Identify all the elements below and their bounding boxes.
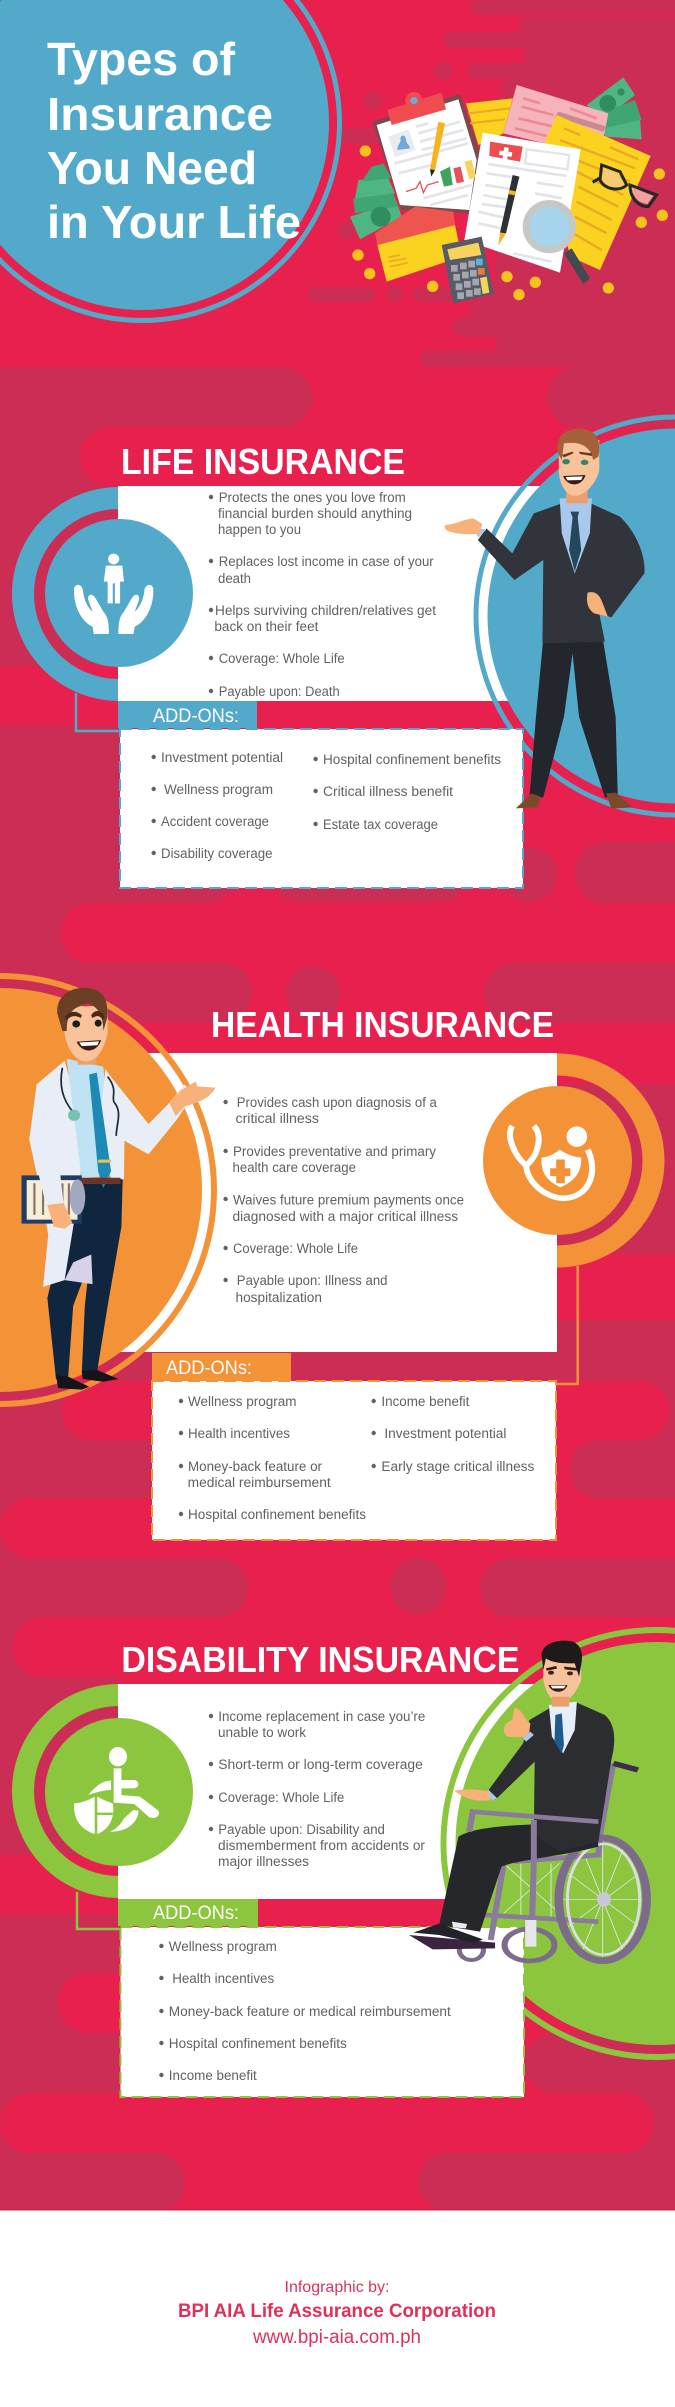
title: You Need <box>47 142 257 194</box>
text block: life benefits: happen to you <box>218 522 301 537</box>
white text card: disability <box>118 1684 600 1899</box>
text block: disability benefits: Short-term or long-term coverage <box>218 1757 423 1772</box>
add-ons card: life: Critical illness benefit <box>323 784 453 799</box>
add-ons card: health: Investment potential <box>384 1426 506 1441</box>
add-ons card: disability: Money-back feature or medical reimbursement <box>169 2004 451 2019</box>
add-ons card: life <box>120 729 523 888</box>
icon ring: life <box>12 487 118 701</box>
right circle: life <box>476 417 675 815</box>
add-ons card: life: Wellness program <box>164 782 273 797</box>
connector line: life <box>76 693 120 731</box>
footer text <box>178 2279 496 2348</box>
text block: disability benefits: major illnesses <box>218 1854 309 1869</box>
add-ons tag: disability: ADD-ONs: <box>153 1903 239 1924</box>
text block: health benefits: health care coverage <box>232 1160 356 1175</box>
add-ons card: life: Hospital confinement benefits <box>323 752 501 767</box>
text block: health benefits <box>223 1095 464 1305</box>
text block: life benefits: Payable upon: Death <box>219 684 340 699</box>
add-ons tag: life <box>118 701 257 728</box>
text block: disability benefits: unable to work <box>218 1725 306 1740</box>
add-ons card: life: Accident coverage <box>161 814 269 829</box>
text block: disability benefits: dismemberment from accidents or <box>218 1838 426 1853</box>
title: Insurance <box>47 88 273 140</box>
footer text: www.bpi-aia.com.ph <box>252 2327 421 2348</box>
text block: health benefits: Coverage: Whole Life <box>233 1241 358 1256</box>
character: doctor <box>22 988 215 1390</box>
text block: disability benefits: Payable upon: Disability and <box>218 1822 385 1837</box>
add-ons card: health: Early stage critical illness <box>381 1459 535 1474</box>
add-ons card: life: Estate tax coverage <box>323 817 438 832</box>
add-ons card: disability: Income benefit <box>169 2068 257 2083</box>
title: in Your Life <box>47 196 301 248</box>
text block: life benefits: Helps surviving children/relatives get <box>215 603 436 618</box>
text block: health benefits: hospitalization <box>236 1290 322 1305</box>
text block: health benefits: critical illness <box>236 1111 319 1126</box>
white text card: health <box>100 1053 557 1352</box>
add-ons card: health: Income benefit <box>381 1394 470 1409</box>
text block: health benefits: Provides cash upon diagnosis of a <box>237 1095 437 1110</box>
text block: health benefits: Payable upon: Illness and <box>237 1273 388 1288</box>
panel: life insurance <box>23 417 675 888</box>
text block: life benefits: back on their feet <box>214 619 319 634</box>
header circle <box>0 0 340 320</box>
add-ons card: health: Hospital confinement benefits <box>188 1507 366 1522</box>
right circle: disability <box>444 1630 675 2057</box>
footer panel <box>0 2210 675 2407</box>
footer text: Infographic by: <box>284 2279 390 2296</box>
add-ons card: health: Health incentives <box>188 1426 290 1441</box>
connector line: disability <box>77 1892 120 1929</box>
connector line: health <box>555 1266 578 1384</box>
add-ons card: health: Money-back feature or <box>188 1459 322 1474</box>
text block: life benefits: Replaces lost income in case of your <box>219 554 434 569</box>
left circle: health <box>0 976 214 1404</box>
add-ons card: disability <box>120 1927 524 2097</box>
text block: disability benefits: Income replacement in case you’re <box>218 1709 425 1724</box>
add-ons card: health <box>152 1381 556 1540</box>
text block: life benefits: financial burden should anything <box>218 506 412 521</box>
add-ons card: life: Disability coverage <box>161 846 272 861</box>
add-ons card: health: Wellness program <box>188 1394 296 1409</box>
icon: wheelchair with shield <box>45 1718 193 1866</box>
text block: life benefits: Protects the ones you love from <box>219 490 406 505</box>
text block: life benefits: Coverage: Whole Life <box>219 651 345 666</box>
heading: life insurance: LIFE INSURANCE <box>121 441 405 482</box>
panel: disability insurance <box>23 1630 675 2097</box>
illustration: documents, money, calculator, magnifier <box>350 77 668 303</box>
add-ons tag: health <box>152 1353 291 1381</box>
text block: health benefits: diagnosed with a major critical illness <box>232 1209 458 1224</box>
heading: health insurance: HEALTH INSURANCE <box>211 1004 554 1045</box>
heading: disability insurance: DISABILITY INSURANCE <box>121 1639 519 1680</box>
add-ons card: health: medical reimbursement <box>188 1475 331 1490</box>
text block: life benefits: death <box>218 571 251 586</box>
add-ons card: disability: Hospital confinement benefits <box>169 2036 347 2051</box>
icon ring: health <box>557 1054 664 1268</box>
icon ring: disability <box>12 1684 118 1898</box>
icon: hands holding person <box>45 519 193 667</box>
title: Types of <box>47 33 236 85</box>
character: businessman <box>445 428 645 809</box>
add-ons tag: life: ADD-ONs: <box>153 706 239 727</box>
add-ons card: life: Investment potential <box>161 750 283 765</box>
add-ons card: disability: Health incentives <box>172 1971 274 1986</box>
text block: disability benefits: Coverage: Whole Life <box>218 1790 344 1805</box>
text block: disability benefits <box>209 1709 426 1869</box>
panel: health insurance <box>0 976 654 1540</box>
title <box>47 33 301 248</box>
add-ons tag: health: ADD-ONs: <box>166 1358 252 1379</box>
text block: health benefits: Waives future premium payments once <box>233 1193 464 1208</box>
footer text: BPI AIA Life Assurance Corporation <box>178 2300 496 2322</box>
icon: stethoscope with shield <box>483 1086 632 1235</box>
text block: life benefits <box>209 490 436 699</box>
add-ons tag: disability <box>118 1899 258 1926</box>
white text card: life <box>118 486 600 701</box>
text block: health benefits: Provides preventative and primary <box>233 1144 436 1159</box>
add-ons card: disability: Wellness program <box>169 1939 277 1954</box>
character: man in wheelchair <box>409 1641 647 1961</box>
